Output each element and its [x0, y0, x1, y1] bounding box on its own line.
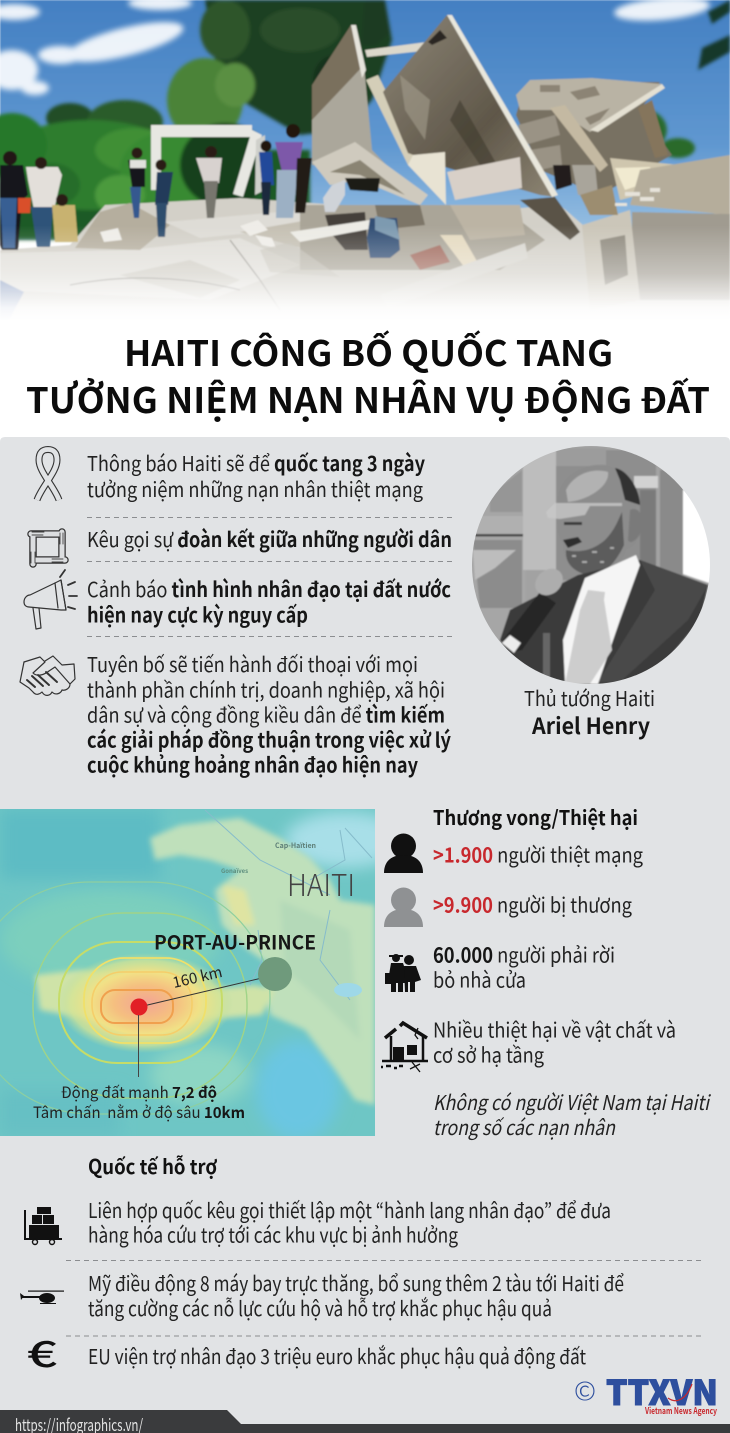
- damage text: cơ sở hạ tầng: [433, 1038, 544, 1068]
- portrait caption: [524, 682, 655, 741]
- damage text: Nhiều thiệt hại về vật chất và: [433, 1014, 676, 1044]
- map: earthquake shakemap: PORT-AU-PRINCE: [154, 926, 316, 956]
- aid item 2 text: tăng cường các nỗ lực cứu hộ và hỗ trợ khắc phục hậu quả: [88, 1292, 552, 1322]
- note: no Vietnamese victims: [433, 1086, 711, 1141]
- map: earthquake shakemap: HAITI: [287, 861, 355, 905]
- note: no Vietnamese victims: trong số các nạn nhân: [433, 1111, 616, 1141]
- aid item 1 text: hàng hóa cứu trợ tới các khu vực bị ảnh hưởng: [88, 1218, 458, 1248]
- title: HAITI CÔNG BỐ QUỐC TANG: [124, 326, 613, 377]
- panel: international aid: [20, 1151, 702, 1378]
- icon: linked hands: [31, 532, 65, 564]
- icon: damaged house: [381, 1023, 428, 1072]
- map: earthquake shakemap: Gonaïves: [221, 866, 248, 875]
- statement 4 text: [87, 648, 451, 778]
- statement 1 text: tưởng niệm những nạn nhân thiệt mạng: [87, 473, 423, 503]
- icon: euro: €: [27, 1326, 58, 1378]
- left leaning wall: [312, 25, 362, 125]
- statement 4 text: cuộc khủng hoảng nhân đạo hiện nay: [87, 748, 418, 778]
- quake caption: [33, 1084, 244, 1122]
- logo: TTXVN: TTXVN: [606, 1366, 718, 1415]
- map: earthquake shakemap: [0, 809, 405, 1140]
- portrait caption: Thủ tướng Haiti: [524, 682, 655, 712]
- aid item 2 text: [88, 1267, 624, 1322]
- hero photo: collapsed building and rescuers: [0, 0, 730, 332]
- footer band with URL: [0, 1410, 730, 1433]
- statement 4 text: thành phần chính trị, doanh nghiệp, xã hội: [87, 674, 445, 704]
- icon: ribbon: [37, 450, 59, 500]
- distance line with markers: [130, 957, 292, 1077]
- face: [596, 465, 604, 466]
- white frame: [151, 125, 265, 197]
- map labels: Cap-Haïtien: [275, 841, 316, 851]
- distance line with markers: 160 km: [170, 961, 224, 993]
- right concrete slabs: [630, 155, 730, 215]
- microphone: [503, 592, 556, 652]
- land: [35, 818, 375, 1105]
- displaced count: bỏ nhà cửa: [433, 964, 526, 994]
- statement 3 text: [87, 573, 451, 628]
- panel: casualties and damage: [381, 802, 711, 1141]
- statement 4 text: Tuyên bố sẽ tiến hành đối thoại với mọi: [87, 648, 418, 678]
- statement 2 text: Kêu gọi sự đoàn kết giữa những người dân: [87, 523, 452, 553]
- title: [26, 326, 710, 424]
- statement 3 text: Cảnh báo tình hình nhân đạo tại đất nước: [87, 573, 451, 603]
- icon: megaphone: [24, 570, 77, 629]
- aid item 1 text: [88, 1194, 611, 1248]
- shake intensity contours: [0, 882, 270, 1114]
- displaced count: [433, 938, 615, 994]
- title: TƯỞNG NIỆM NẠN NHÂN VỤ ĐỘNG ĐẤT: [26, 373, 710, 424]
- blue corner object: [0, 280, 24, 306]
- statement 4 text: dân sự và cộng đồng kiều dân để tìm kiếm: [87, 698, 445, 728]
- icon: person grey: [384, 888, 423, 927]
- big leaning wall: [383, 15, 555, 197]
- displaced count: 60.000 người phải rời: [433, 938, 615, 968]
- injured count: >9.900 người bị thương: [433, 888, 632, 918]
- icon: helicopter: [20, 1290, 64, 1304]
- lower centre debris: [300, 205, 545, 270]
- dead count: >1.900 người thiệt mạng: [433, 838, 643, 868]
- statement 1 text: Thông báo Haiti sẽ để quốc tang 3 ngày: [87, 447, 425, 477]
- quake caption: Động đất mạnh 7,2 độ: [61, 1081, 217, 1103]
- logo: TTXVN: ©: [574, 1371, 596, 1408]
- ground rubble: [0, 196, 729, 303]
- icon: handshake: [20, 656, 75, 695]
- grey content panel: [0, 437, 730, 1433]
- aid item 1 text: Liên hợp quốc kêu gọi thiết lập một “hành lang nhân đạo” để đưa: [88, 1194, 611, 1224]
- icon: person black: [384, 834, 423, 873]
- panel: government statements: [20, 447, 454, 778]
- icon: displaced family: [385, 954, 421, 992]
- back right rubble pile: [516, 82, 672, 195]
- icon: cargo trolley: [24, 1207, 62, 1244]
- damage text: [433, 1014, 676, 1068]
- aid item 3 text: EU viện trợ nhân đạo 3 triệu euro khắc phục hậu quả động đất: [88, 1340, 586, 1370]
- suit: [500, 560, 708, 690]
- white fade: [0, 225, 730, 322]
- statement 3 text: hiện nay cực kỳ nguy cấp: [87, 598, 308, 628]
- portrait caption: Ariel Henry: [531, 709, 650, 741]
- portrait of Ariel Henry: [470, 445, 715, 690]
- aid heading: Quốc tế hỗ trợ: [88, 1151, 217, 1180]
- casualties heading: Thương vong/Thiệt hại: [433, 802, 638, 831]
- aid item 2 text: Mỹ điều động 8 máy bay trực thăng, bổ sung thêm 2 tàu tới Haiti để: [88, 1267, 624, 1297]
- quake caption: Tâm chấn nằm ở độ sâu 10km: [33, 1101, 245, 1123]
- statement 4 text: các giải pháp đồng thuận trong việc xử lý: [87, 724, 451, 754]
- people: [0, 124, 400, 258]
- statement 1 text: [87, 447, 425, 503]
